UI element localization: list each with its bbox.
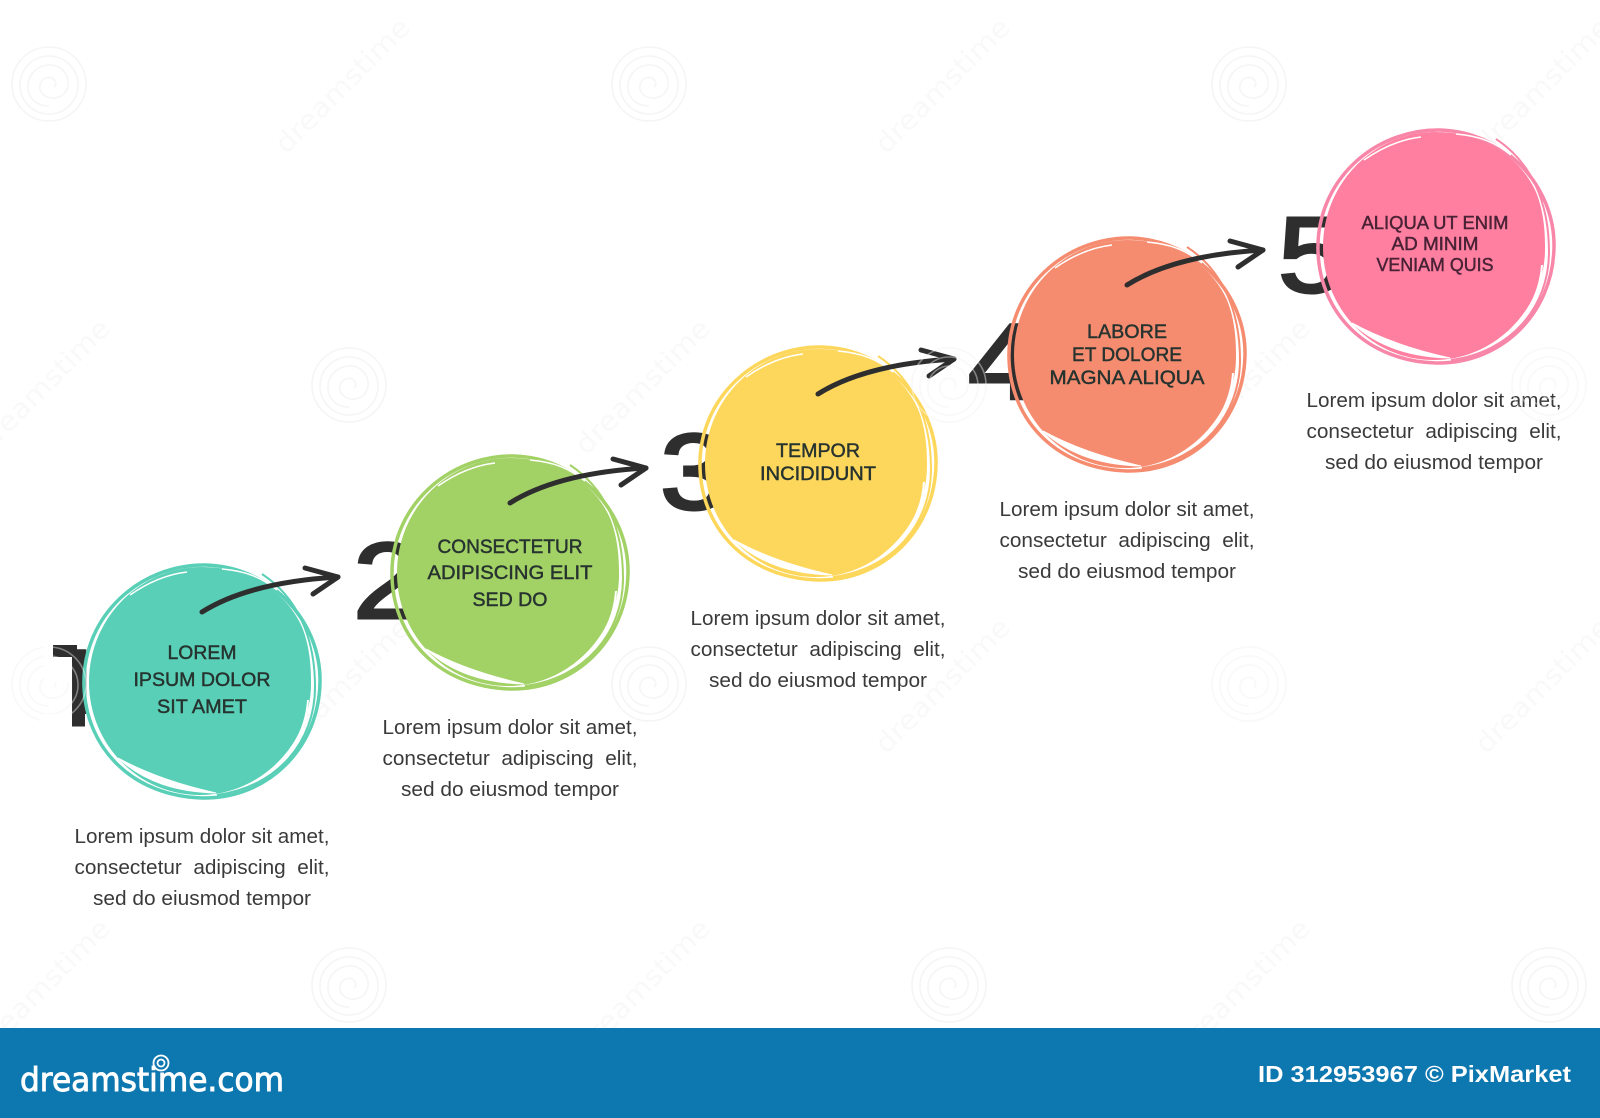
step 1 — [40, 565, 338, 910]
description 3: sed do eiusmod tempor — [709, 670, 927, 692]
description 5: Lorem ipsum dolor sit amet, — [1306, 390, 1562, 412]
step 5 — [1278, 130, 1562, 474]
description 2: consectetur adipiscing elit, — [382, 748, 638, 770]
description 1: Lorem ipsum dolor sit amet, — [74, 826, 330, 848]
description 3: consectetur adipiscing elit, — [690, 639, 946, 661]
heading 4: MAGNA ALIQUA — [1050, 367, 1204, 389]
description 5: sed do eiusmod tempor — [1325, 452, 1543, 474]
heading 4: LABORE — [1087, 321, 1167, 343]
watermark pattern: dreamstime — [269, 612, 417, 760]
circle 2 — [392, 456, 628, 689]
step 2 — [353, 456, 646, 801]
heading 2: ADIPISCING ELIT — [428, 562, 593, 584]
description 5: consectetur adipiscing elit, — [1306, 421, 1562, 443]
heading 1: LOREM — [168, 642, 236, 664]
heading 2: SED DO — [472, 589, 548, 611]
description 2 — [382, 717, 638, 801]
circle 3 — [700, 347, 936, 580]
watermark pattern: dreamstime — [569, 913, 717, 1061]
number 3: 3 — [660, 411, 728, 532]
description 5 — [1306, 390, 1562, 474]
description 1 — [74, 826, 330, 910]
number 1: 1 — [43, 627, 111, 748]
arrow 4 — [1127, 241, 1263, 285]
watermark overlay on content — [12, 348, 1586, 721]
heading 1: IPSUM DOLOR — [134, 669, 270, 691]
heading 1: SIT AMET — [157, 696, 247, 718]
heading 5 — [1362, 213, 1508, 275]
heading 1 — [134, 642, 270, 718]
circle 5 — [1318, 130, 1554, 363]
watermark pattern: dreamstime — [569, 313, 717, 461]
watermark pattern: dreamstime — [1169, 313, 1317, 461]
heading 4 — [1050, 321, 1204, 389]
heading 5: AD MINIM — [1392, 234, 1478, 254]
heading 3: INCIDIDUNT — [760, 463, 876, 485]
arrow 1 — [202, 568, 338, 612]
logo spiral icon — [154, 1056, 168, 1070]
circle 4 — [1009, 238, 1245, 471]
watermark pattern: dreamstime — [869, 612, 1017, 760]
circle 1 — [84, 565, 320, 798]
description 4 — [1000, 499, 1254, 583]
watermark pattern: dreamstime — [1169, 913, 1317, 1061]
heading 4: ET DOLORE — [1072, 344, 1182, 366]
number 5: 5 — [1278, 194, 1346, 315]
description 3 — [690, 608, 946, 692]
description 1: sed do eiusmod tempor — [93, 888, 311, 910]
footer banner — [0, 1028, 1600, 1118]
watermark pattern: dreamstime — [869, 12, 1017, 160]
description 2: sed do eiusmod tempor — [401, 779, 619, 801]
description 4: sed do eiusmod tempor — [1018, 561, 1236, 583]
step 3 — [660, 347, 954, 692]
arrow 3 — [818, 350, 954, 394]
number 2: 2 — [353, 520, 421, 641]
arrow 2 — [510, 459, 646, 503]
heading 5: ALIQUA UT ENIM — [1362, 213, 1508, 233]
heading 5: VENIAM QUIS — [1376, 255, 1494, 275]
heading 3 — [760, 440, 876, 485]
number 4: 4 — [968, 301, 1038, 422]
description 4: consectetur adipiscing elit, — [1000, 530, 1254, 552]
description 2: Lorem ipsum dolor sit amet, — [382, 717, 638, 739]
heading 2 — [428, 536, 593, 611]
step 4 — [968, 238, 1263, 583]
description 1: consectetur adipiscing elit, — [74, 857, 330, 879]
heading 3: TEMPOR — [776, 440, 860, 462]
logo text: dreamstime.com — [20, 1060, 284, 1099]
heading 2: CONSECTETUR — [438, 536, 582, 558]
description 3: Lorem ipsum dolor sit amet, — [690, 608, 946, 630]
image id text: ID 312953967 © PixMarket — [1258, 1061, 1571, 1087]
watermark pattern: dreamstime — [269, 12, 417, 160]
description 4: Lorem ipsum dolor sit amet, — [1000, 499, 1254, 521]
